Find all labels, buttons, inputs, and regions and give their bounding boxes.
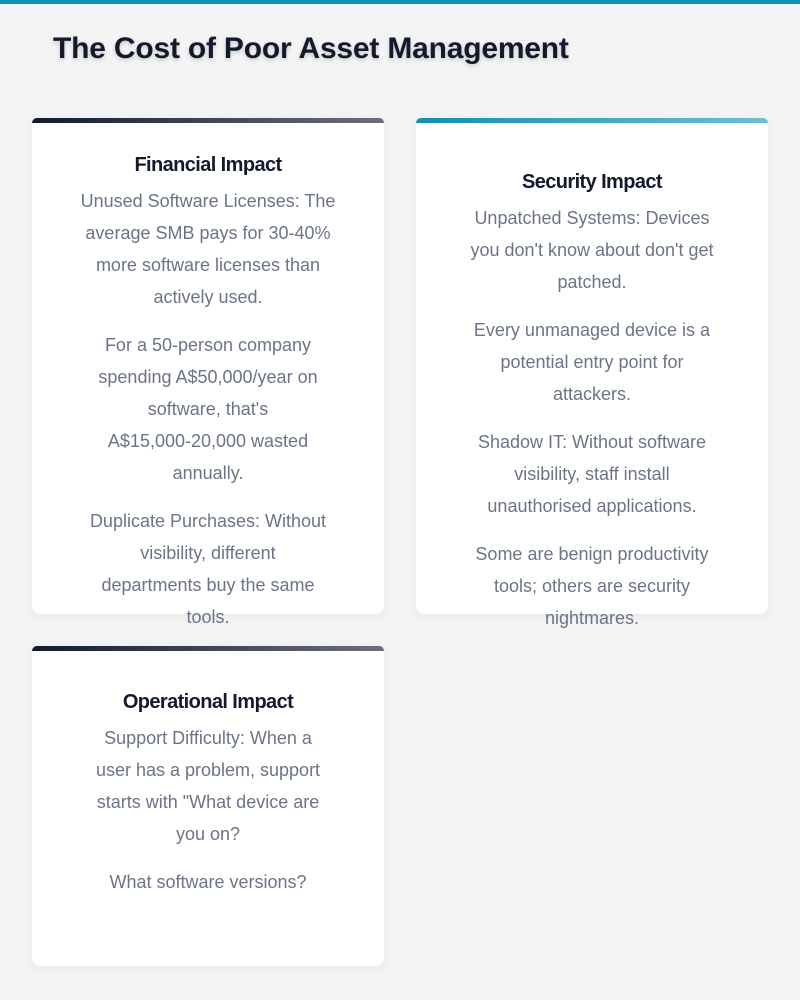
panel: security impact bbox=[416, 118, 768, 614]
text: cost example: annually. bbox=[173, 463, 243, 483]
text: support difficulty: Support Difficulty: When a bbox=[104, 728, 312, 748]
text: entry point: Every unmanaged device is a bbox=[474, 320, 710, 340]
text: cost example: A$15,000-20,000 wasted bbox=[108, 431, 308, 451]
text: shadow IT: visibility, staff install bbox=[514, 464, 670, 484]
text: unused licenses: more software licenses than bbox=[96, 255, 320, 275]
text: benign tools: nightmares. bbox=[545, 608, 639, 628]
text: duplicate purchases: tools. bbox=[186, 607, 230, 627]
text: cost example: For a 50-person company bbox=[105, 335, 311, 355]
heading: financial: Financial Impact bbox=[134, 154, 282, 176]
text: unpatched: patched. bbox=[557, 272, 627, 292]
text: unused licenses bbox=[81, 191, 335, 307]
text: duplicate purchases: departments buy the same bbox=[101, 575, 315, 595]
text: entry point bbox=[474, 320, 710, 404]
text: unpatched bbox=[470, 208, 714, 292]
text: unused licenses: actively used. bbox=[153, 287, 263, 307]
text: entry point: attackers. bbox=[553, 384, 631, 404]
text: support difficulty: starts with "What device are bbox=[97, 792, 319, 812]
text: entry point: potential entry point for bbox=[500, 352, 684, 372]
text: unused licenses: average SMB pays for 30-40% bbox=[85, 223, 331, 243]
text: duplicate purchases: Duplicate Purchases: Without bbox=[90, 511, 326, 531]
text: duplicate purchases: visibility, different bbox=[140, 543, 276, 563]
text: duplicate purchases bbox=[90, 511, 326, 627]
heading: security: Security Impact bbox=[522, 171, 662, 193]
text: support difficulty: you on? bbox=[176, 824, 240, 844]
text: cost example: spending A$50,000/year on bbox=[98, 367, 318, 387]
text: benign tools bbox=[475, 544, 709, 628]
text: unpatched: Unpatched Systems: Devices bbox=[474, 208, 710, 228]
text: benign tools: Some are benign productivity bbox=[475, 544, 709, 564]
title: The Cost of Poor Asset Management bbox=[53, 32, 569, 65]
text: shadow IT: Shadow IT: Without software bbox=[478, 432, 706, 452]
text: support difficulty bbox=[96, 728, 320, 844]
heading: operational: Operational Impact bbox=[123, 691, 293, 713]
text: cost example: software, that's bbox=[148, 399, 268, 419]
panel: operational impact bbox=[32, 646, 384, 966]
text: shadow IT bbox=[478, 432, 706, 516]
text: benign tools: tools; others are security bbox=[494, 576, 690, 596]
panel: financial impact bbox=[32, 118, 384, 614]
text: software versions: What software versions? bbox=[109, 872, 307, 892]
text: unpatched: you don't know about don't get bbox=[470, 240, 714, 260]
text: support difficulty: user has a problem, support bbox=[96, 760, 320, 780]
text: shadow IT: unauthorised applications. bbox=[487, 496, 697, 516]
text: unused licenses: Unused Software Licenses: The bbox=[81, 191, 335, 211]
text: cost example bbox=[98, 335, 318, 483]
